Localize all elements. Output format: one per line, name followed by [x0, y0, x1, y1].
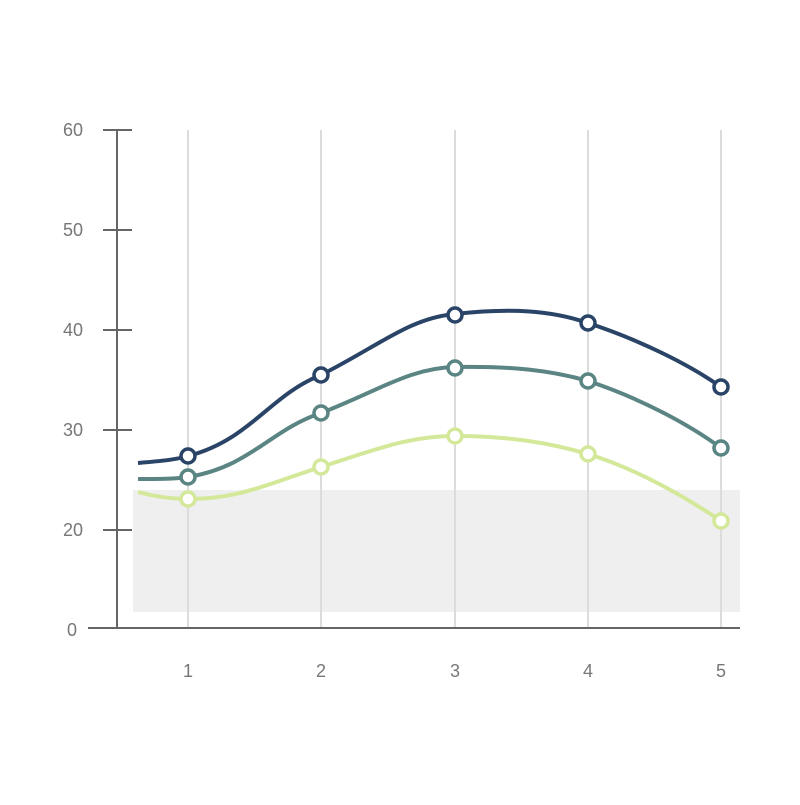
y labels: 40 — [63, 320, 83, 340]
y axis — [103, 130, 132, 628]
y labels: 30 — [63, 420, 83, 440]
background band — [133, 490, 740, 612]
x labels: 3 — [450, 661, 460, 681]
x labels: 1 — [183, 661, 193, 681]
x axis — [88, 627, 740, 629]
x labels: 2 — [316, 661, 326, 681]
series: teal — [138, 361, 728, 484]
x labels — [183, 661, 726, 681]
x labels: 5 — [716, 661, 726, 681]
x labels: 4 — [583, 661, 593, 681]
series: light green — [138, 429, 728, 528]
y labels: 20 — [63, 520, 83, 540]
y labels: 60 — [63, 120, 83, 140]
y labels: 0 — [67, 620, 77, 640]
y labels — [63, 120, 83, 640]
y labels: 50 — [63, 220, 83, 240]
series: navy — [138, 308, 728, 463]
